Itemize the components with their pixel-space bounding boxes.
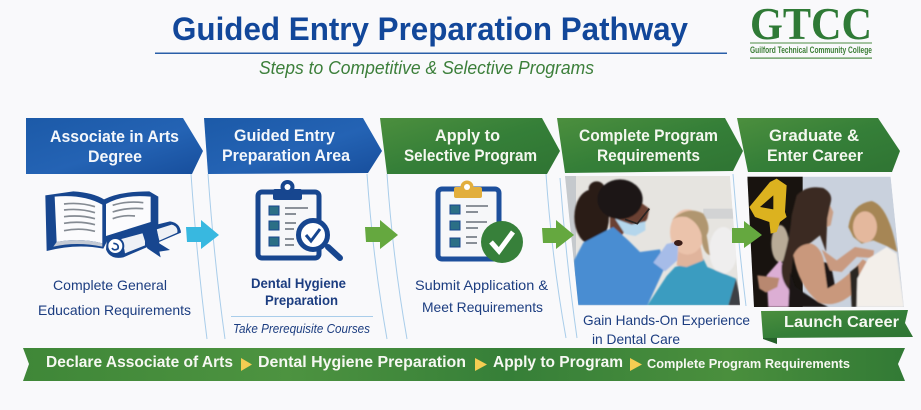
step 2 heading: Preparation Area	[222, 147, 351, 165]
step 3 description: Meet Requirements	[422, 299, 543, 315]
photo: dental hygiene student with patient	[565, 176, 742, 305]
step 5 heading: Graduate &	[769, 127, 859, 145]
step 3 description: Submit Application &	[415, 277, 549, 293]
title underline	[155, 52, 727, 54]
step 2 note: Take Prerequisite Courses	[233, 321, 370, 336]
photo: graduation pinning	[747, 176, 904, 308]
arrow: step 4 to 5	[732, 221, 762, 248]
step 1 heading: Degree	[88, 148, 142, 166]
step 3 heading: Apply to	[435, 127, 500, 145]
step 4	[557, 118, 750, 347]
yellow triangle 2	[475, 358, 487, 371]
arrow: step 2 to 3	[365, 220, 398, 249]
icon: open book and diploma	[45, 191, 181, 258]
step 2	[204, 118, 382, 336]
yellow triangle 1	[241, 358, 252, 371]
banner ribbon	[23, 348, 905, 381]
step 4 description: in Dental Care	[592, 331, 680, 347]
launch career ribbon: Launch Career	[784, 314, 899, 331]
banner step: apply: Apply to Program	[493, 354, 623, 371]
step 2 header chevron	[204, 118, 382, 174]
step 4 header chevron	[557, 118, 743, 173]
arrow: step 1 to 2	[186, 220, 219, 249]
step 3	[380, 118, 560, 315]
step 4 heading: Complete Program	[579, 127, 718, 145]
bottom pathway banner	[23, 348, 905, 381]
step 1 description: Complete General	[53, 277, 167, 293]
step 1 header chevron	[26, 118, 203, 174]
banner step: declare: Declare Associate of Arts	[46, 354, 233, 371]
banner step: dental hygiene: Dental Hygiene Preparation	[258, 354, 466, 371]
icon: clipboard with check badge	[438, 180, 523, 263]
step 3 heading: Selective Program	[404, 147, 537, 165]
logo: GTCC: GTCC	[750, 0, 872, 49]
column separator lines	[191, 174, 746, 339]
step 5	[737, 118, 913, 344]
title: Guided Entry Preparation Pathway	[172, 11, 688, 47]
arrow: step 3 to 4	[542, 220, 574, 249]
yellow triangle 3	[630, 358, 642, 371]
step 3 header chevron	[380, 118, 560, 174]
logo: GTCC: Guilford Technical Community College	[750, 45, 872, 56]
step 5 heading: Enter Career	[767, 147, 864, 165]
step 1 description: Education Requirements	[38, 302, 191, 318]
step 4 heading: Requirements	[597, 147, 700, 165]
icon: clipboard with magnifier	[258, 180, 340, 258]
step 5 header chevron	[737, 118, 900, 172]
step 2 heading: Guided Entry	[234, 127, 336, 145]
launch career ribbon	[761, 310, 913, 344]
step 2 description: Preparation	[265, 293, 338, 308]
banner step: complete: Complete Program Requirements	[647, 357, 850, 371]
step 1	[26, 118, 203, 318]
step 1 heading: Associate in Arts	[50, 128, 179, 146]
subtitle: Steps to Competitive & Selective Programs	[259, 58, 594, 78]
step 2 description: Dental Hygiene	[251, 276, 346, 291]
step 4 description: Gain Hands-On Experience	[583, 312, 750, 328]
